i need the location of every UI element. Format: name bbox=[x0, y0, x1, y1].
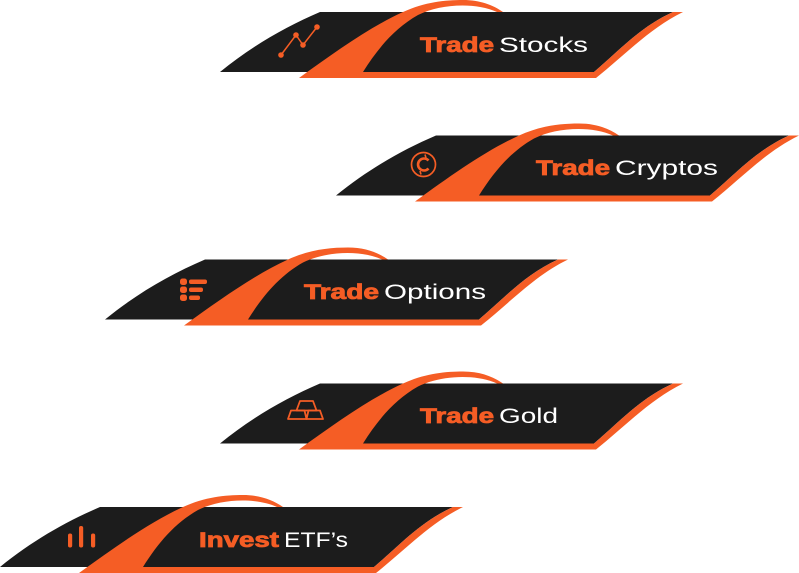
label: Stocks bbox=[499, 34, 588, 57]
card: Trade Stocks bbox=[220, 0, 683, 78]
icon: line chart bbox=[278, 24, 320, 58]
label: Trade bbox=[536, 157, 610, 180]
card: Trade Options bbox=[105, 248, 568, 326]
label bbox=[304, 281, 486, 304]
card body bbox=[220, 12, 673, 72]
icon: list bbox=[180, 278, 207, 301]
label: Cryptos bbox=[615, 157, 718, 180]
icon: gold bars bbox=[288, 401, 323, 419]
card body bbox=[0, 507, 453, 567]
card: Trade Cryptos bbox=[336, 124, 799, 202]
label: Trade bbox=[420, 405, 494, 428]
icon: crypto coin bbox=[412, 152, 436, 176]
label: ETF’s bbox=[284, 529, 348, 552]
label bbox=[199, 529, 348, 552]
orange swoosh bbox=[415, 124, 799, 202]
card: Trade Gold bbox=[220, 372, 683, 450]
card body bbox=[220, 384, 673, 444]
icon: bar chart bbox=[68, 526, 95, 548]
orange swoosh bbox=[299, 372, 683, 450]
card body bbox=[105, 260, 558, 320]
label: Invest bbox=[199, 529, 279, 552]
card: Invest ETF's bbox=[0, 495, 463, 573]
card body bbox=[336, 136, 789, 196]
orange swoosh bbox=[79, 495, 463, 573]
label bbox=[536, 157, 718, 180]
label: Options bbox=[384, 281, 486, 304]
label bbox=[420, 405, 558, 428]
label: Trade bbox=[304, 281, 379, 304]
orange swoosh bbox=[184, 248, 568, 326]
label: Trade bbox=[420, 34, 494, 57]
label: Gold bbox=[499, 405, 558, 428]
orange swoosh bbox=[299, 0, 683, 78]
label bbox=[420, 34, 588, 57]
